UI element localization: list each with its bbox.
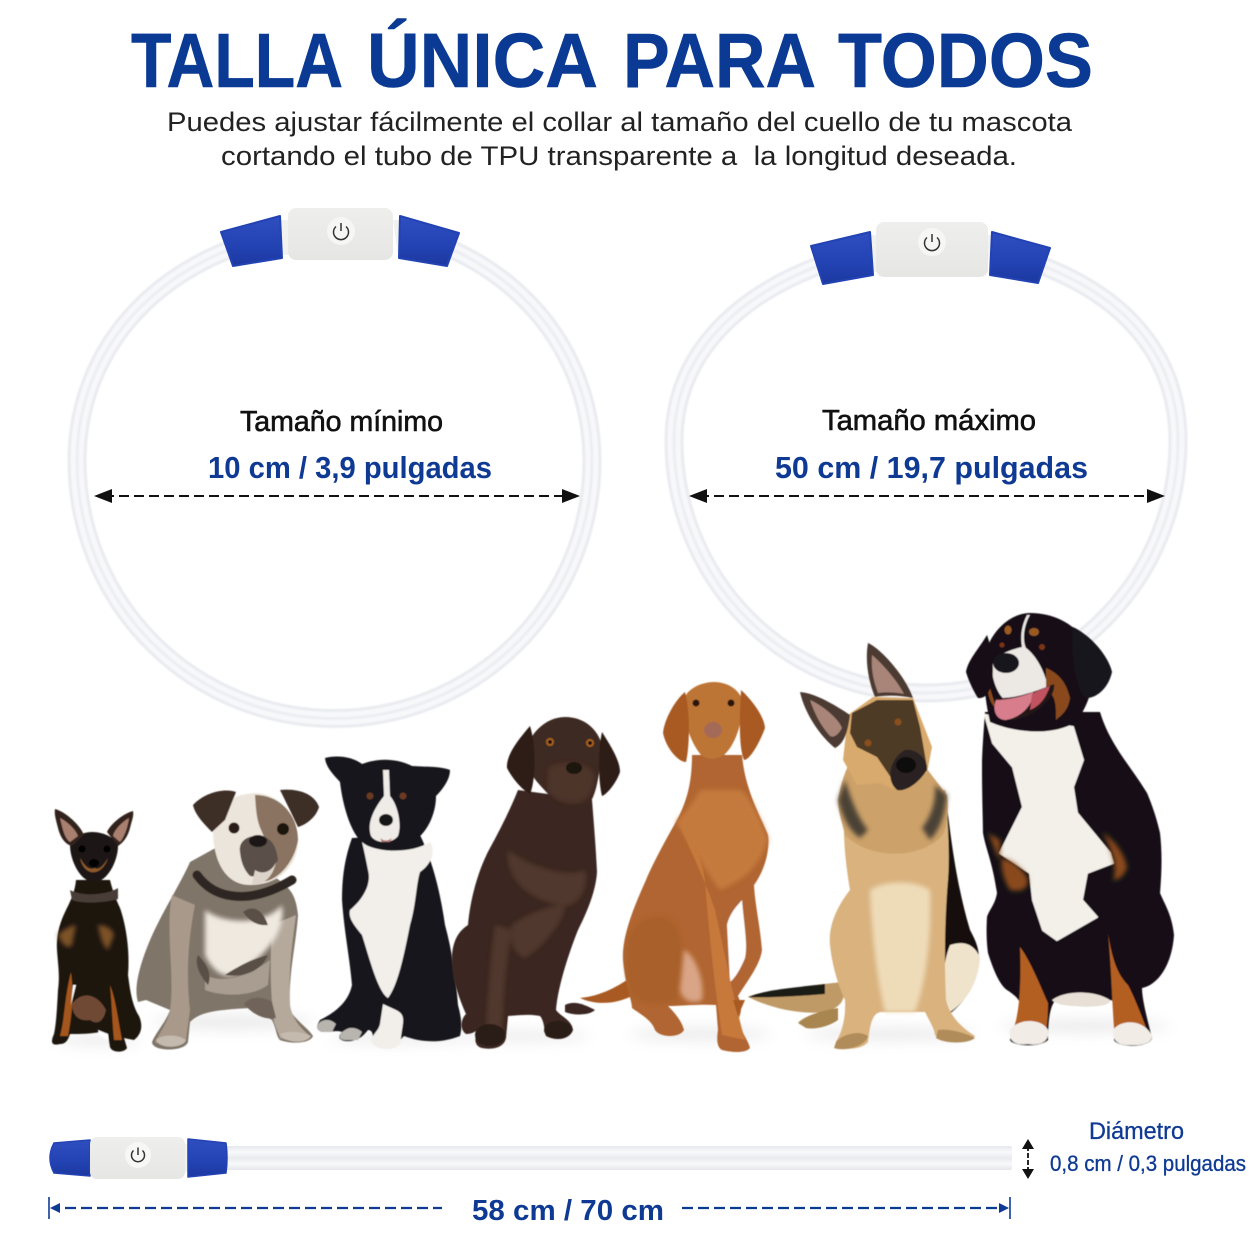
diameter label: Diámetro xyxy=(1089,1118,1184,1145)
title: TALLA xyxy=(131,18,343,104)
collar: minimum size ring xyxy=(77,208,592,718)
dog 4: chocolate labrador xyxy=(452,717,620,1049)
subtitle: cortando el tubo de TPU transparente a la longitud deseada. xyxy=(221,141,1017,171)
label: maximum size: 50 cm / 19,7 pulgadas xyxy=(775,450,1088,485)
dog 3: border collie xyxy=(317,756,461,1049)
dog 5: vizsla xyxy=(580,682,768,1052)
dimension arrow: minimum xyxy=(94,489,580,503)
collar clasp: minimum xyxy=(221,208,459,266)
subtitle xyxy=(167,107,1073,171)
title: ÚNICA xyxy=(367,18,598,104)
dimension arrow: maximum xyxy=(689,489,1165,503)
diameter arrow xyxy=(1022,1139,1034,1179)
label: maximum size: Tamaño máximo xyxy=(822,405,1036,437)
label: maximum size xyxy=(775,405,1088,485)
label: minimum size: 10 cm / 3,9 pulgadas xyxy=(208,450,492,485)
dog 2: bulldog xyxy=(136,790,319,1050)
dog 6: german shepherd xyxy=(748,643,980,1049)
title: TODOS xyxy=(838,18,1093,104)
straight collar tube xyxy=(50,1137,1012,1179)
diameter label xyxy=(1050,1118,1246,1176)
title xyxy=(131,18,1093,104)
dog 7: bernese mountain dog xyxy=(966,613,1174,1046)
label: minimum size: Tamaño mínimo xyxy=(240,406,443,438)
floor shadows xyxy=(56,1015,1170,1045)
length label: 58 cm / 70 cm xyxy=(472,1195,664,1227)
length dimension line xyxy=(49,1197,1010,1219)
collar: maximum size ring xyxy=(674,222,1178,693)
dog 1: miniature pinscher xyxy=(52,809,141,1052)
straight collar clasp xyxy=(50,1137,227,1179)
title: PARA xyxy=(623,18,816,104)
collar clasp: maximum xyxy=(811,222,1050,284)
subtitle: Puedes ajustar fácilmente el collar al tamaño del cuello de tu mascota xyxy=(167,107,1073,137)
label: minimum size xyxy=(208,406,492,485)
